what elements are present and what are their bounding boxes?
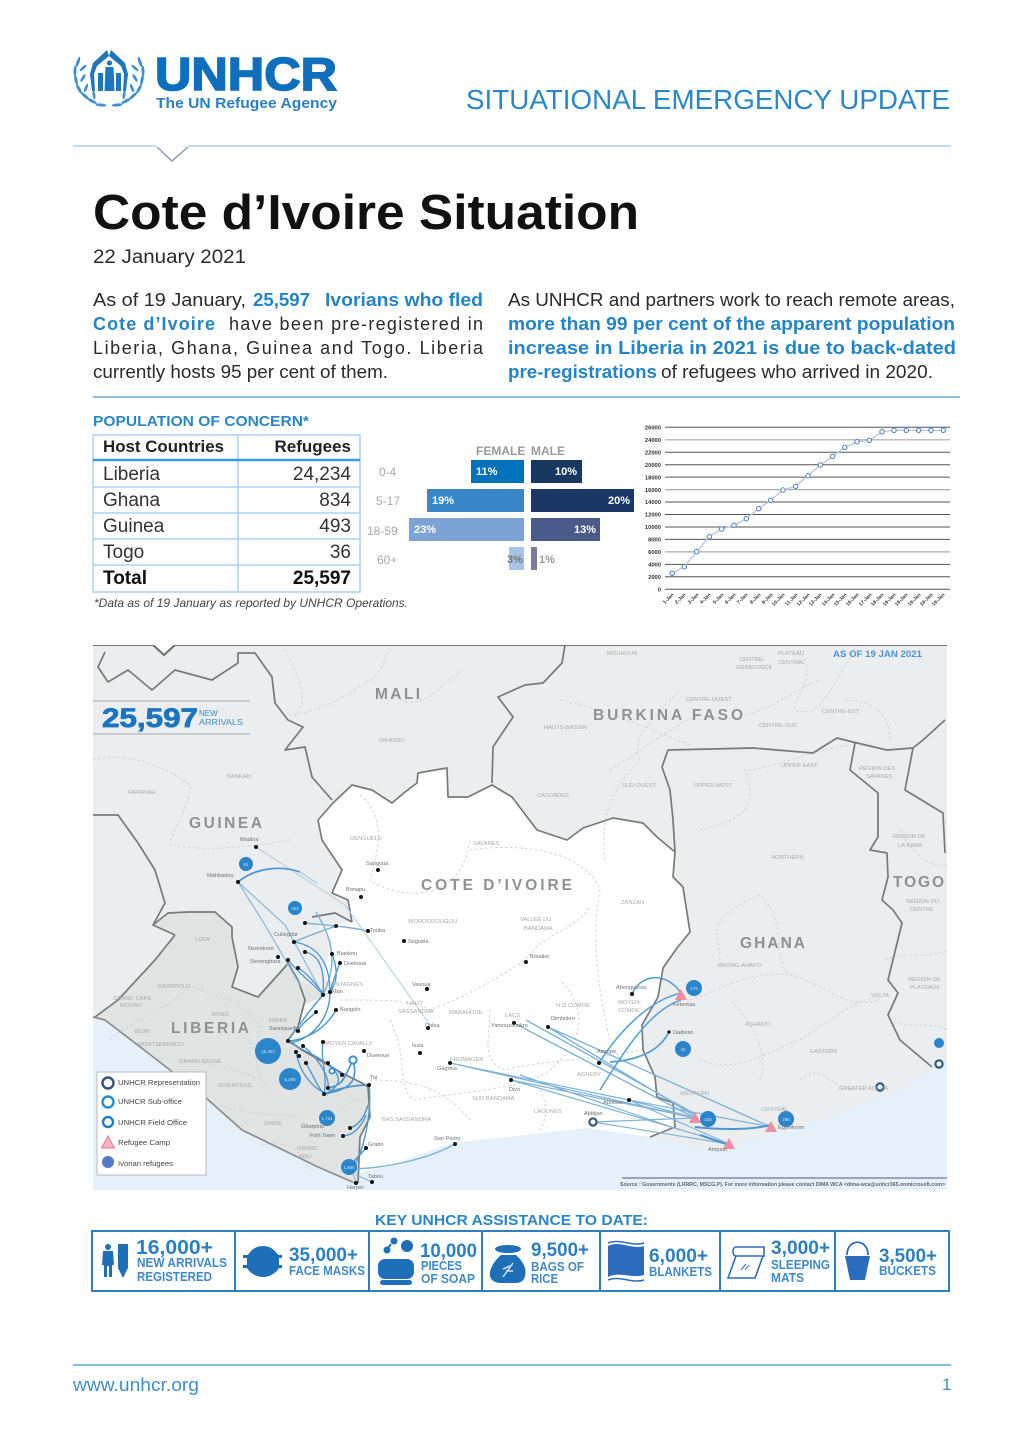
map panel (93, 640, 947, 1191)
chart: cumulative arrivals line chart: 12-Jan (796, 592, 811, 608)
map: town labels: Madina (240, 837, 259, 843)
text block: right summary (508, 290, 956, 382)
map: country labels: GHANA (740, 935, 808, 952)
map: region labels: NORTHERN (771, 855, 804, 861)
map: region labels: GBARPOLU (158, 984, 190, 990)
map: region labels: MOUNO (120, 1003, 143, 1009)
map: region labels: MOYEN- (618, 1000, 641, 1006)
map: region labels: NIMBA (269, 1018, 287, 1024)
chart: age and sex pyramid: 20% (608, 495, 630, 507)
map: region labels: SASSANDRA (398, 1009, 434, 1015)
map: town labels (207, 837, 805, 1191)
map: country borders (93, 645, 945, 1183)
text block: right summary: more than 99 per cent of the apparent population (508, 314, 955, 334)
chart: cumulative arrivals line chart: 4000 (648, 563, 661, 569)
map: town labels: Issia (412, 1043, 424, 1049)
map: bubble values: 91 (243, 862, 249, 867)
item: bags of rice: BAGS OF (531, 1260, 584, 1274)
map: region labels: FARANAH (128, 790, 155, 796)
map: town labels: Yamoussoukro (491, 1023, 528, 1029)
map: region labels: MONTAGNES (326, 982, 363, 988)
table: host countries: 25,597 (293, 568, 351, 589)
item: face masks: FACE MASKS (289, 1264, 365, 1278)
chart: cumulative arrivals line chart: 9-Jan (761, 592, 774, 606)
map: country labels: GUINEA (189, 815, 265, 832)
table: host countries: 24,234 (293, 464, 351, 485)
map: legend: UNHCR Representation (118, 1078, 200, 1087)
map: bubble values: 178 (690, 986, 698, 991)
item: new arrivals: REGISTERED (137, 1270, 212, 1284)
chart: age and sex pyramid: 23% (414, 524, 436, 536)
tagline: The UN Refugee Agency (156, 95, 338, 112)
map: region labels: UPPER EAST (781, 763, 818, 769)
map: town labels: Senengbara (250, 959, 281, 965)
footer: website: www.unhcr.org (72, 1375, 199, 1395)
map: region labels: SUD-OUEST (622, 783, 657, 789)
map: region labels: PLATEAU (778, 651, 804, 657)
map: legend: Refugee Camp (118, 1138, 170, 1147)
map: town labels: Dadieso (673, 1030, 694, 1036)
map: town labels: Dimbokro (551, 1016, 575, 1022)
chart: cumulative arrivals line chart: 2-Jan (674, 592, 687, 606)
map: total arrivals callout: 25,597 (102, 703, 198, 733)
table: host countries: Ghana (103, 490, 160, 511)
chart: cumulative arrivals line chart: 10-Jan (771, 592, 786, 608)
map: region labels: SUD BANDAMA (472, 1096, 515, 1102)
map: town labels: Gagnoa (437, 1066, 458, 1072)
map: region labels: AGNEBY (577, 1072, 601, 1078)
chart: cumulative arrivals line chart (645, 426, 950, 608)
map: region labels: SAVANES (866, 774, 893, 780)
item: soap: OF SOAP (421, 1272, 475, 1286)
item: buckets (845, 1242, 937, 1280)
text block: left summary: currently hosts 95 per cent of them. (93, 362, 388, 382)
map: bubble values: 286 (782, 1117, 790, 1122)
chart: age and sex pyramid: 1% (539, 554, 555, 566)
item: new arrivals: 16,000+ (136, 1237, 213, 1259)
chart: cumulative arrivals line chart: 16-Jan (845, 592, 860, 608)
map: town labels: Aboisso (603, 1100, 623, 1106)
map: region labels: PLATEAUX (910, 985, 940, 991)
map: top border with notch (93, 644, 947, 655)
map: town labels: Tai (370, 1075, 377, 1081)
map: region labels: ZANZAN (621, 900, 644, 906)
map: region labels (113, 651, 941, 1160)
item: blankets: 6,000+ (649, 1246, 708, 1267)
map: region labels: ASHANTI (745, 1022, 771, 1028)
chart: cumulative arrivals line chart: 3-Jan (687, 592, 700, 606)
table: host countries: Togo (103, 542, 144, 563)
map: total arrivals callout: NEW (199, 709, 218, 718)
chart: cumulative arrivals line chart: 13-Jan (808, 592, 823, 608)
map: region labels: CENTRE- (739, 657, 765, 663)
map: region labels: HAUTS-BASSIN (544, 725, 587, 731)
map: region labels: CENTRE-SUD (759, 723, 797, 729)
map: region labels: MARAHOUE (449, 1010, 483, 1016)
map: town labels: Man (332, 989, 343, 995)
map: region labels: BRONG-AHAFO (718, 963, 762, 969)
chart: age and sex pyramid: 0-4 (379, 465, 397, 479)
chart: cumulative arrivals line chart: 15-Jan (833, 592, 848, 608)
map: bubble values: 15,362 (261, 1049, 275, 1054)
logo: UNHCR (73, 48, 338, 112)
item: blankets (608, 1241, 712, 1281)
text block: right summary: pre-registrations (508, 362, 657, 382)
map: town labels: Divo (509, 1087, 520, 1093)
map: region labels: CENTRE-EST (822, 709, 859, 715)
item: sleeping mats: SLEEPING (771, 1258, 830, 1272)
chart: age and sex pyramid: 11% (476, 466, 498, 478)
chart: cumulative arrivals line chart: 8000 (648, 538, 661, 544)
map: sea (93, 1017, 947, 1190)
chart: cumulative arrivals line chart: 12000 (645, 513, 661, 519)
chart: age and sex pyramid: 18-59 (367, 524, 398, 538)
icon: laurel and sheltering hands (73, 50, 145, 107)
chart: cumulative arrivals line chart: 24000 (645, 438, 661, 444)
map: country labels: COTE D’IVOIRE (421, 877, 575, 894)
chart: cumulative arrivals line chart: 18-Jan (870, 592, 885, 608)
map: region labels: DENGUELE (350, 836, 382, 842)
map: towns (236, 845, 671, 1185)
map: country labels: TOGO (893, 874, 947, 891)
text block: left summary: 25,597 (253, 290, 310, 310)
table: host countries (93, 435, 360, 592)
map: region labels: EASTERN (810, 1049, 837, 1055)
map: region labels: KRU (299, 1154, 311, 1160)
map: UNHCR offices (329, 1056, 943, 1126)
table: host countries: Host Countries (103, 437, 224, 456)
chart: cumulative arrivals line chart: 19-Jan (931, 592, 946, 608)
chart: age and sex pyramid: 19% (432, 495, 454, 507)
map: bubble values: 45 (680, 1047, 686, 1052)
map: region labels: WOROODOUGOU (408, 919, 457, 925)
table: host countries: Liberia (103, 464, 160, 485)
chart: cumulative arrivals line chart: 8-Jan (749, 592, 762, 606)
map: region labels: FROMAGER (450, 1057, 484, 1063)
item: bags of rice: RICE (531, 1272, 558, 1286)
chart: cumulative arrivals line chart: 19-Jan (894, 592, 909, 608)
map: town labels: Duekoue (344, 961, 366, 967)
map: region labels: RIVERCESS (218, 1083, 252, 1089)
map: legend: UNHCR Field Office (118, 1118, 187, 1127)
map: town labels: Touba (370, 928, 386, 934)
item: face masks: 35,000+ (289, 1245, 358, 1266)
map: region labels: UPPER WEST (694, 783, 733, 789)
map: bubble values: 5,286 (284, 1077, 296, 1082)
item: bags of rice: 9,500+ (531, 1240, 589, 1261)
map: total arrivals callout: ARRIVALS (199, 718, 243, 727)
map: total arrivals callout (93, 701, 250, 734)
date: 22 January 2021 (93, 247, 246, 268)
table: host countries: Total (103, 568, 147, 589)
map: town labels: Abengourou (616, 985, 646, 991)
map: town labels: Harper (347, 1185, 364, 1191)
map: legend: UNHCR Sub-office (118, 1097, 182, 1106)
map: town labels: Bonapu (346, 887, 365, 893)
map: town labels: Tabou (368, 1174, 383, 1180)
item: buckets: 3,500+ (879, 1246, 937, 1267)
header label: SITUATIONAL EMERGENCY UPDATE (466, 84, 950, 115)
map: region labels: LA KARA (898, 843, 922, 849)
text block: right summary: increase in Liberia in 2021 is due to back-dated (508, 338, 956, 358)
map: region labels: VOLTA (871, 993, 889, 999)
map: country labels: MALI (375, 686, 423, 703)
map: region labels: CASCADES (537, 793, 569, 799)
chart: cumulative arrivals line chart: 19-Jan (882, 592, 897, 608)
map: bubble values: 1,855 (343, 1165, 355, 1170)
map: town labels: Adzope (597, 1049, 616, 1055)
map: region labels: CENTRE-OUEST (686, 697, 732, 703)
item: buckets: BUCKETS (879, 1264, 936, 1278)
map: region labels: SINOE (264, 1121, 282, 1127)
map: town labels: Abidjan (584, 1111, 603, 1117)
map: country labels: LIBERIA (171, 1020, 252, 1037)
text block: left summary: Ivorians who fled (325, 290, 483, 310)
map: region labels: SAVANES (473, 841, 500, 847)
chart: cumulative arrivals line chart: 2000 (648, 575, 661, 581)
map: town labels: Bouake (530, 954, 549, 960)
table: host countries: Refugees (274, 437, 351, 456)
map: bubble values: 325 (704, 1117, 712, 1122)
chart: cumulative arrivals line chart: 4-Jan (699, 592, 712, 606)
chart: cumulative arrivals line chart: 10000 (645, 525, 661, 531)
map: region labels: BANDAMA (524, 926, 553, 932)
chart: cumulative arrivals line chart: 20000 (645, 463, 661, 469)
map: refugee camps (675, 989, 777, 1149)
text block: left summary: have been pre-registered in (229, 314, 483, 334)
map: region labels: CENTRAL (761, 1107, 789, 1113)
map: region labels: LOFA (195, 937, 210, 943)
item: sleeping mats (728, 1238, 830, 1285)
chart: age and sex pyramid: FEMALE (476, 444, 525, 458)
item: soap: PIECES (421, 1259, 462, 1273)
map: region labels: REGION DES (859, 766, 896, 772)
map: region labels: BAS SASSANDRA (382, 1117, 431, 1123)
text block: right summary: As UNHCR and partners work to reach remote areas, (508, 290, 955, 310)
chart: cumulative arrivals line chart: 26000 (645, 426, 661, 432)
map: legend (97, 1072, 206, 1175)
map: legend: Ivorian refugees (118, 1159, 173, 1168)
table: host countries: Guinea (103, 516, 165, 537)
chart: age and sex pyramid: 13% (574, 524, 596, 536)
map: town labels: Duekoue (367, 1053, 389, 1059)
item: bags of rice (490, 1240, 589, 1286)
item: new arrivals (102, 1237, 227, 1284)
text block: left summary: Liberia, Ghana, Guinea and Togo. Liberia (93, 338, 484, 358)
chart: cumulative arrivals line chart: 19-Jan (919, 592, 934, 608)
map: region labels: MOUHOUN (607, 651, 638, 657)
chart: cumulative arrivals line chart: 16000 (645, 488, 661, 494)
item: face masks (243, 1245, 365, 1278)
map: region labels: VALLEE DU (520, 917, 551, 923)
heading: key assistance: KEY UNHCR ASSISTANCE TO DATE: (375, 1213, 648, 1229)
map: region labels: LAGUNES (534, 1109, 562, 1115)
title: Cote d’Ivoire Situation (93, 186, 639, 240)
header rule with chevron (73, 146, 951, 161)
map: region labels: MOYEN CAVALLY (325, 1041, 373, 1047)
text block: left summary: As of 19 January, (93, 290, 246, 310)
map: town labels: Sangoua (366, 861, 389, 867)
text block: left summary (93, 290, 484, 382)
map: town labels: Daloa (425, 1023, 441, 1029)
map: admin boundaries (93, 640, 947, 1170)
chart: cumulative arrivals line chart: 14000 (645, 500, 661, 506)
footer: page number: 1 (942, 1375, 951, 1394)
chart: cumulative arrivals line chart: 6000 (648, 550, 661, 556)
item: sleeping mats: 3,000+ (771, 1238, 830, 1259)
map: town labels: Gbarpolu (301, 1124, 324, 1130)
map: region labels: REGION DE (908, 977, 941, 983)
chart: cumulative arrivals line chart: 14-Jan (821, 592, 836, 608)
item: soap: 10,000 (420, 1241, 477, 1262)
chart: age and sex pyramid: 3% (507, 554, 523, 566)
map: region labels: CENTRE (910, 907, 934, 913)
panel: key assistance (92, 1231, 949, 1291)
map: bubble values: 402 (291, 906, 299, 911)
chart: age and sex pyramid: 5-17 (376, 494, 400, 508)
map: town labels: Vavoua (412, 982, 431, 988)
map: region labels: DIKASSO (379, 738, 405, 744)
chart: cumulative arrivals line chart: 17-Jan (858, 592, 873, 608)
item: new arrivals: NEW ARRIVALS (137, 1256, 227, 1270)
map: region labels: LACS (505, 1013, 520, 1019)
map: refugee bubbles (239, 857, 944, 1175)
chart: cumulative arrivals line chart: 0 (658, 588, 661, 594)
map: region labels: GRAND CAPE (113, 996, 151, 1002)
item: soap (378, 1238, 477, 1286)
map: region labels: CENTRAL (778, 660, 806, 666)
text block: right summary: of refugees who arrived in 2020. (661, 362, 933, 382)
item: sleeping mats: MATS (771, 1271, 804, 1285)
map: region labels: GRAND (297, 1146, 318, 1152)
map: date label: AS OF 19 JAN 2021 (833, 649, 923, 660)
map: country labels (171, 686, 947, 1037)
map: region labels: KANKAN (227, 774, 251, 780)
map: region labels: BOMI (135, 1029, 150, 1035)
map: Liberia (95, 912, 370, 1183)
chart: cumulative arrivals line chart: 1-Jan (662, 592, 675, 606)
map: source note: Source : Governments (LRRRC, MSCG,P). For more information please contact DIMA WCA <dima-wca@unhcr365.onmicrosoft.com> (620, 1182, 945, 1188)
map: bubble values: 1,731 (321, 1116, 333, 1121)
chart: cumulative arrivals line chart: 19-Jan (907, 592, 922, 608)
map: region labels: MONTSERRADO (138, 1042, 184, 1048)
text block: left summary: Cote d’Ivoire (93, 314, 215, 334)
map: region labels: N'ZI COMOE (556, 1003, 590, 1009)
chart: age and sex pyramid (367, 444, 634, 570)
table: host countries: 493 (319, 516, 351, 537)
map: flows (238, 847, 771, 1183)
map: town labels: Mahbadou (207, 873, 233, 879)
map: town labels: Fetentaa (673, 1002, 696, 1008)
map: town labels: Egyeikrom (778, 1125, 805, 1131)
wordmark: UNHCR (155, 48, 337, 100)
chart: age and sex pyramid: MALE (531, 444, 565, 458)
chart: age and sex pyramid: 60+ (377, 553, 397, 567)
map: country labels: BURKINA FASO (593, 707, 746, 724)
item: blankets: BLANKETS (649, 1265, 712, 1279)
chart: cumulative arrivals line chart: 11-Jan (784, 592, 799, 607)
map: town labels: Bangolo (340, 1007, 361, 1013)
chart: cumulative arrivals line chart: 6-Jan (724, 592, 737, 606)
chart: cumulative arrivals line chart: 5-Jan (712, 592, 725, 606)
map: region labels: GREATER ACCRA (839, 1086, 888, 1092)
chart: cumulative arrivals line chart: 7-Jan (736, 592, 749, 606)
chart: cumulative arrivals line chart: 22000 (645, 450, 661, 456)
map: town labels: Cullegdar (274, 932, 298, 938)
chart: cumulative arrivals line chart: 18000 (645, 475, 661, 481)
map: town labels: Fish Town (310, 1133, 335, 1139)
map: town labels: Biankou (337, 951, 357, 957)
chart: age and sex pyramid: 10% (555, 466, 577, 478)
table: host countries: 834 (319, 490, 351, 511)
map: region labels: HAUT (407, 1001, 423, 1007)
map: region labels: COMOE (618, 1008, 640, 1014)
map: bubble values (243, 862, 790, 1170)
map: region labels: REGION DU (906, 899, 939, 905)
map: town labels: Seguela (408, 939, 429, 945)
map: town labels: Nzerekore (248, 946, 274, 952)
map: town labels: Grabo (368, 1142, 384, 1148)
map: Cote d'Ivoire (288, 768, 690, 1173)
map: region labels: GRAND BASSA (179, 1059, 221, 1065)
table: host countries: 36 (330, 542, 351, 563)
map: town labels: San Pedro (434, 1136, 460, 1142)
map: region labels: REGION DE (893, 834, 926, 840)
map: region labels: BONG (212, 1012, 230, 1018)
map: town labels: Ampain (708, 1147, 727, 1153)
map: region labels: WESTERN (680, 1091, 709, 1097)
heading: population of concern: POPULATION OF CONCERN* (93, 413, 309, 430)
map: town labels: Sanniquellie (269, 1026, 299, 1032)
map: region labels: GRANDJOCK (736, 665, 773, 671)
table footnote: *Data as of 19 January as reported by UNHCR Operations. (94, 596, 408, 610)
